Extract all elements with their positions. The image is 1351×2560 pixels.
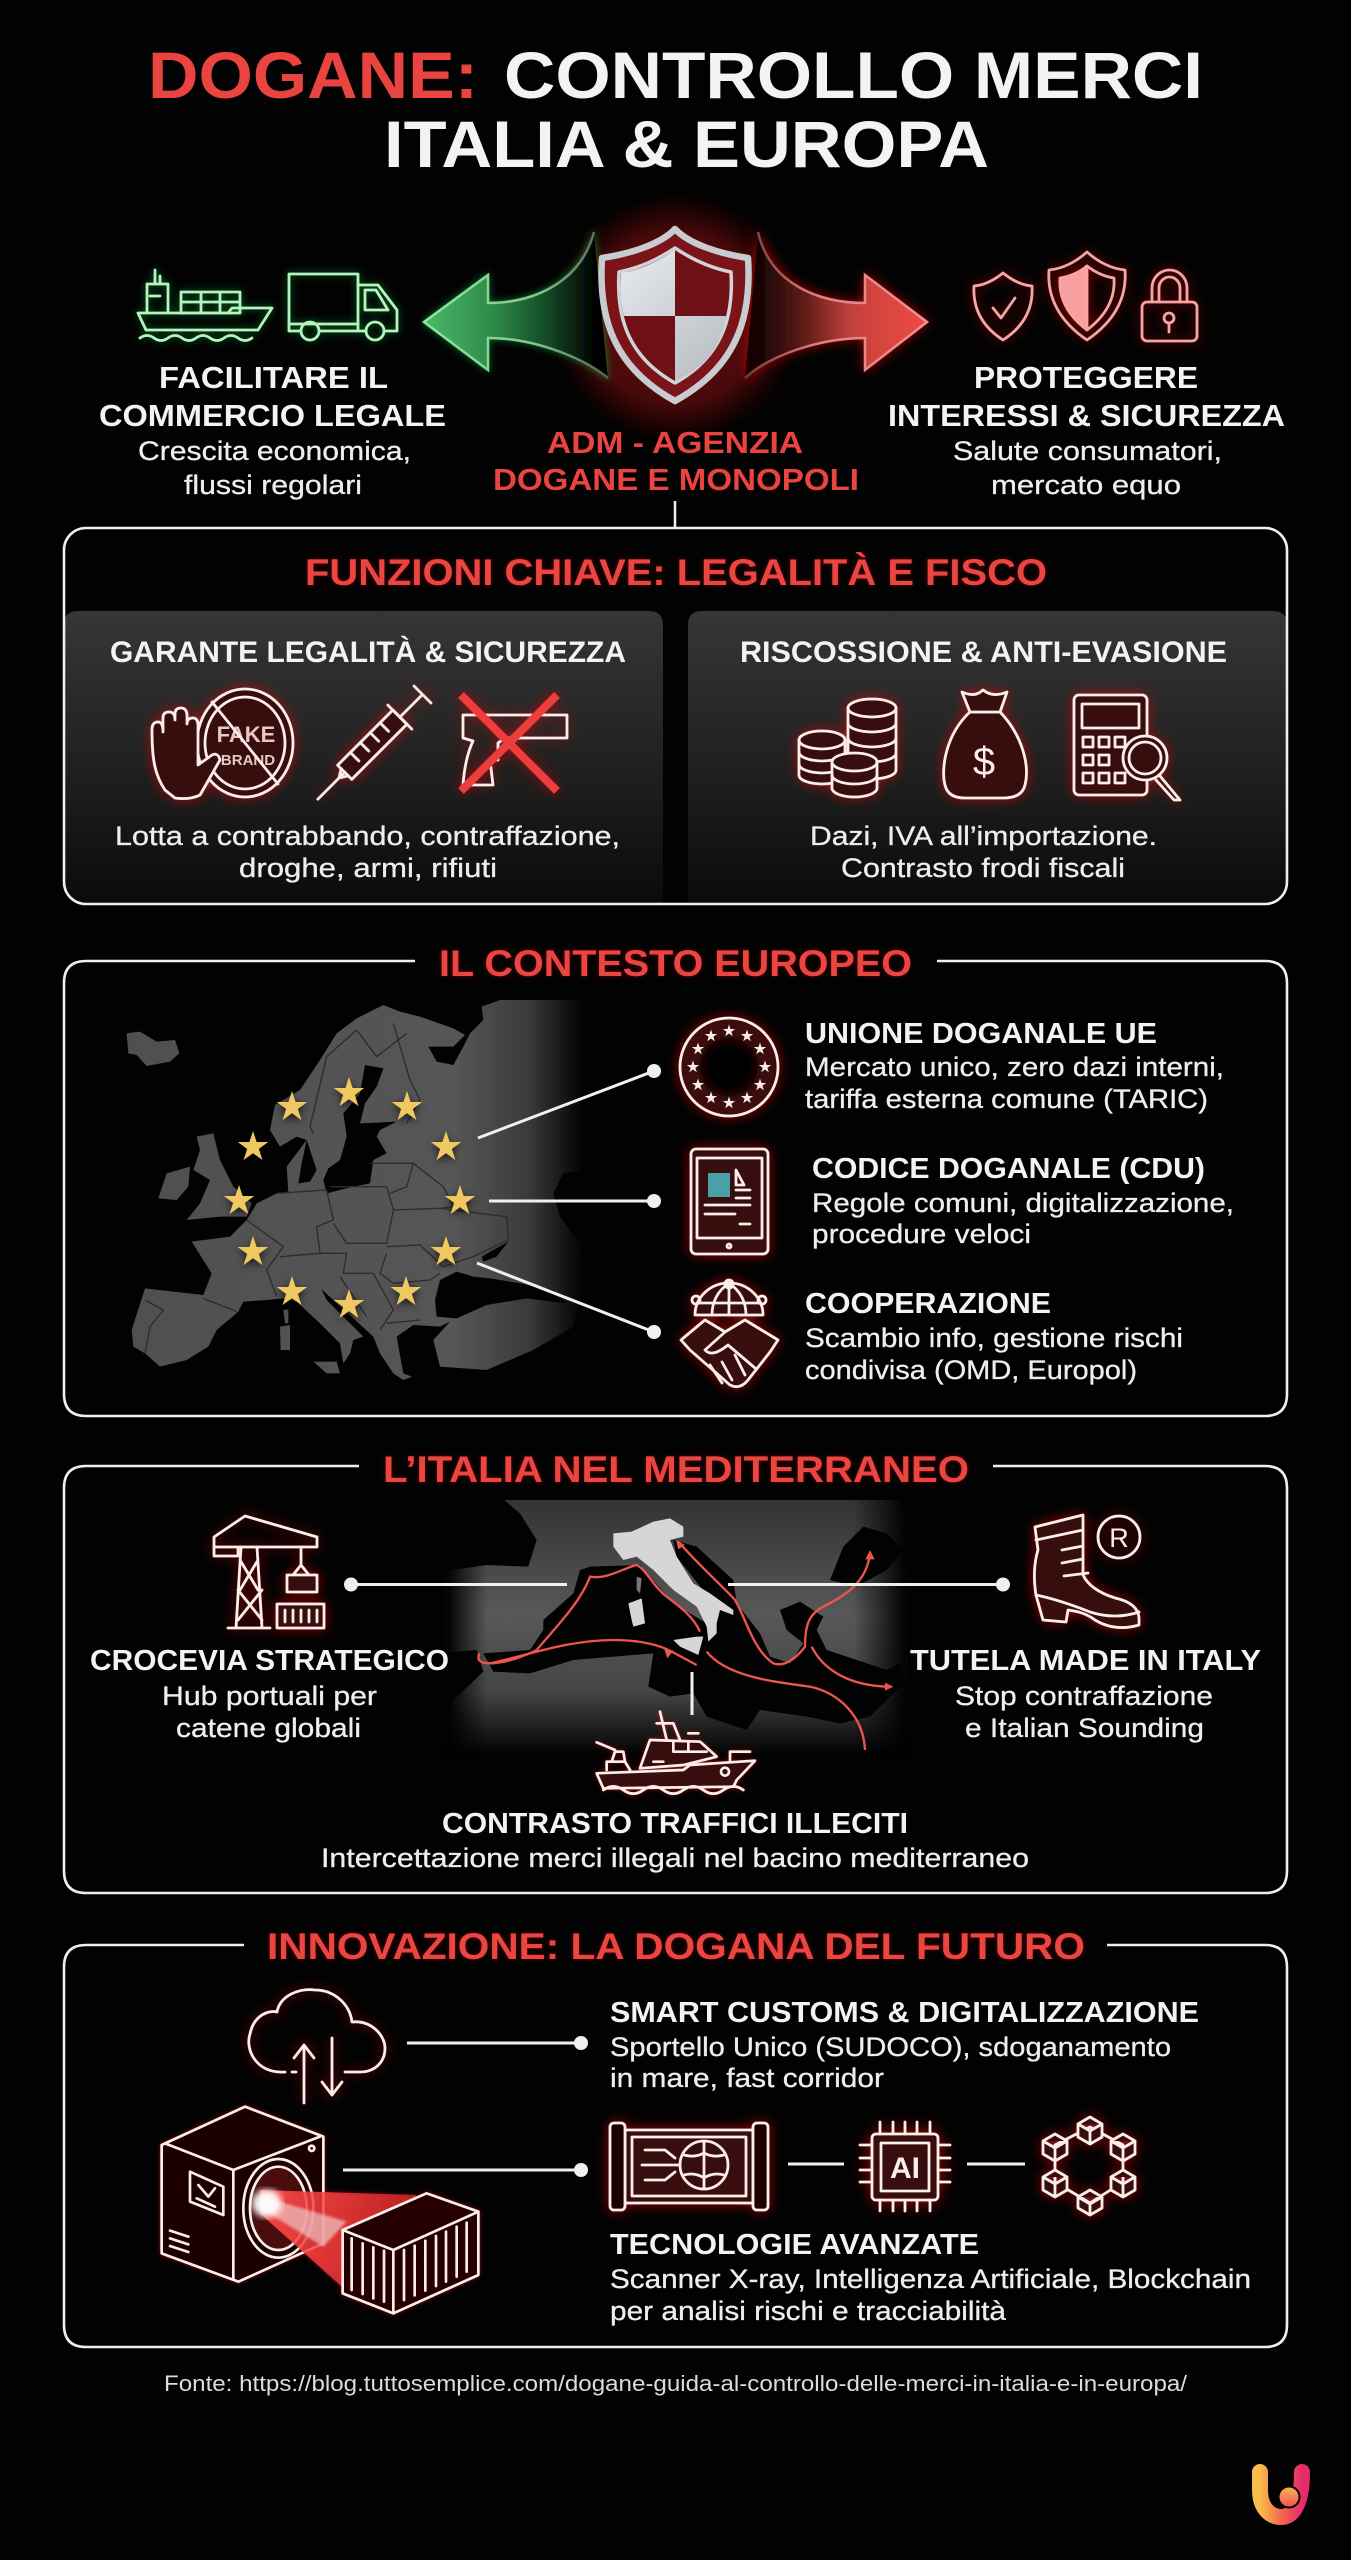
icon: boot with registered mark bbox=[1034, 1515, 1140, 1628]
heading: L’ITALIA NEL MEDITERRANEO bbox=[383, 1449, 969, 1490]
icon: port crane bbox=[214, 1516, 324, 1628]
panel: Italia nel Mediterraneo bbox=[64, 1449, 1287, 1893]
text: made in italy: Stop contraffazione bbox=[955, 1681, 1213, 1711]
heading: FUNZIONI CHIAVE: LEGALITÀ E FISCO bbox=[305, 552, 1047, 593]
text: facilitare: COMMERCIO LEGALE bbox=[99, 398, 446, 433]
line: tablet to chip bbox=[788, 2162, 844, 2166]
panel: innovazione bbox=[64, 1926, 1287, 2347]
text: tecnologie avanzate: per analisi rischi e tracciabilità bbox=[610, 2296, 1007, 2326]
icon: boot with registered mark: R bbox=[1109, 1523, 1129, 1553]
logo bbox=[1260, 2472, 1302, 2517]
icon: EU stars ring bbox=[680, 1018, 778, 1116]
connectors: map to items bbox=[344, 1578, 1010, 1715]
text: made in italy: e Italian Sounding bbox=[965, 1713, 1204, 1743]
panel border bbox=[64, 961, 1287, 1416]
text: ADM bbox=[493, 425, 859, 497]
subpanel right background bbox=[688, 611, 1287, 904]
title bbox=[148, 38, 1203, 181]
panel border bbox=[64, 1945, 1287, 2347]
text: crocevia bbox=[90, 1645, 449, 1743]
icon: AI chip: AI bbox=[890, 2152, 920, 2185]
text: tecnologie avanzate: Scanner X-ray, Intelligenza Artificiale, Blockchain bbox=[610, 2264, 1251, 2294]
text: codice doganale: procedure veloci bbox=[812, 1219, 1031, 1249]
icon: ship and truck (green) bbox=[138, 270, 397, 340]
text: ADM: DOGANE E MONOPOLI bbox=[493, 462, 859, 497]
text: unione doganale: tariffa esterna comune (TARIC) bbox=[805, 1084, 1208, 1114]
panel border bbox=[64, 1466, 1287, 1893]
text: made in italy bbox=[910, 1645, 1261, 1743]
icon: money bag bbox=[944, 690, 1026, 798]
text: proteggere bbox=[888, 360, 1285, 500]
text: proteggere: mercato equo bbox=[991, 470, 1181, 500]
heading: INNOVAZIONE: LA DOGANA DEL FUTURO bbox=[267, 1926, 1085, 1967]
icon: stop hand and fake brand: FAKE bbox=[217, 722, 275, 747]
connector: cloud bbox=[407, 2036, 588, 2050]
text: traffici illeciti: CONTRASTO TRAFFICI ILLECITI bbox=[442, 1808, 908, 1840]
icon: AI chip bbox=[860, 2122, 950, 2211]
text: codice doganale: CODICE DOGANALE (CDU) bbox=[812, 1153, 1205, 1185]
icon: security shields and lock bbox=[974, 252, 1197, 341]
text: cooperazione: Scambio info, gestione rischi bbox=[805, 1323, 1183, 1353]
map: Mediterranean bbox=[440, 1497, 907, 1757]
icon: stop hand and fake brand bbox=[152, 689, 293, 799]
subheading left: GARANTE LEGALITÀ & SICUREZZA bbox=[110, 635, 626, 669]
text: unione doganale: UNIONE DOGANALE UE bbox=[805, 1018, 1157, 1050]
text: riscossione bbox=[810, 821, 1157, 883]
text: legalita bbox=[115, 821, 620, 883]
icon: cloud with arrows bbox=[249, 1990, 385, 2103]
text: made in italy: TUTELA MADE IN ITALY bbox=[910, 1645, 1261, 1677]
text: smart customs: SMART CUSTOMS & DIGITALIZZAZIONE bbox=[610, 1997, 1199, 2029]
text: proteggere: Salute consumatori, bbox=[953, 436, 1222, 466]
connector: scanner bbox=[343, 2163, 588, 2177]
arrow: green to the left bbox=[424, 232, 608, 378]
text: codice doganale: Regole comuni, digitalizzazione, bbox=[812, 1188, 1234, 1218]
text: codice doganale bbox=[812, 1153, 1234, 1249]
heading: IL CONTESTO EUROPEO bbox=[439, 943, 912, 984]
text: crocevia: catene globali bbox=[176, 1713, 361, 1743]
text: facilitare: flussi regolari bbox=[184, 470, 362, 500]
icon: calculator and magnifier bbox=[1074, 695, 1180, 800]
text: cooperazione: condivisa (OMD, Europol) bbox=[805, 1355, 1137, 1385]
arrow: red to the right bbox=[745, 232, 927, 378]
icon: crossed-out gun bbox=[461, 695, 567, 791]
text: riscossione: Contrasto frodi fiscali bbox=[841, 853, 1125, 883]
title: DOGANE: bbox=[148, 38, 478, 112]
text: proteggere: INTERESSI & SICUREZZA bbox=[888, 398, 1285, 433]
text: crocevia: Hub portuali per bbox=[162, 1681, 377, 1711]
text: legalita: Lotta a contrabbando, contraffazione, bbox=[115, 821, 620, 851]
text: crocevia: CROCEVIA STRATEGICO bbox=[90, 1645, 449, 1677]
text: riscossione: Dazi, IVA all’importazione. bbox=[810, 821, 1157, 851]
subpanel left background bbox=[64, 611, 663, 904]
icon: stop hand and fake brand: BRAND bbox=[221, 752, 275, 769]
text: unione doganale bbox=[805, 1018, 1224, 1114]
icon: digital customs code tablet bbox=[691, 1149, 768, 1254]
text: traffici illeciti: Intercettazione merci illegali nel bacino mediterraneo bbox=[321, 1843, 1029, 1873]
panel: funzioni chiave bbox=[64, 528, 1287, 904]
source line: Fonte: https://blog.tuttosemplice.com/dogane-guida-al-controllo-delle-merci-in-italia-e-in-europa/ bbox=[164, 2371, 1188, 2396]
text: tecnologie avanzate bbox=[610, 2229, 1251, 2326]
text: facilitare bbox=[99, 360, 446, 500]
icon: blockchain bbox=[1043, 2117, 1135, 2215]
icon: x-ray scanner and container bbox=[162, 2107, 478, 2313]
panel: contesto europeo bbox=[64, 943, 1287, 1416]
line: chip to blockchain bbox=[967, 2162, 1025, 2166]
icon: globe and handshake bbox=[681, 1280, 778, 1387]
icon: patrol boat bbox=[597, 1712, 755, 1794]
text: legalita: droghe, armi, rifiuti bbox=[239, 853, 497, 883]
text: facilitare: Crescita economica, bbox=[138, 436, 411, 466]
subheading right: RISCOSSIONE & ANTI-EVASIONE bbox=[740, 636, 1227, 669]
icon: AI brain on tablet bbox=[610, 2123, 768, 2210]
connector: ADM to functions bbox=[674, 501, 676, 528]
routes bbox=[478, 1542, 892, 1750]
title: CONTROLLO MERCI bbox=[504, 38, 1203, 112]
icon: ADM shield bbox=[601, 229, 749, 401]
text: smart customs: in mare, fast corridor bbox=[610, 2063, 884, 2093]
text: smart customs bbox=[610, 1997, 1199, 2093]
map: Europe bbox=[127, 1000, 583, 1380]
icon: coin stacks bbox=[799, 699, 896, 797]
text: cooperazione: COOPERAZIONE bbox=[805, 1288, 1051, 1320]
text: tecnologie avanzate: TECNOLOGIE AVANZATE bbox=[610, 2229, 979, 2261]
stars on map bbox=[224, 1077, 475, 1318]
text: facilitare: FACILITARE IL bbox=[159, 360, 388, 395]
text: smart customs: Sportello Unico (SUDOCO), sdoganamento bbox=[610, 2032, 1171, 2062]
title: ITALIA & EUROPA bbox=[384, 107, 989, 181]
text: ADM: ADM - AGENZIA bbox=[547, 425, 803, 460]
text: cooperazione bbox=[805, 1288, 1183, 1385]
shield halo bbox=[550, 193, 800, 443]
text: traffici illeciti bbox=[321, 1808, 1029, 1873]
text: unione doganale: Mercato unico, zero dazi interni, bbox=[805, 1052, 1224, 1082]
icon: syringe bbox=[306, 682, 435, 811]
text: proteggere: PROTEGGERE bbox=[974, 360, 1198, 395]
connectors: map to items bbox=[477, 1064, 661, 1339]
icon: money bag: $ bbox=[973, 740, 995, 784]
panel border bbox=[64, 528, 1287, 904]
